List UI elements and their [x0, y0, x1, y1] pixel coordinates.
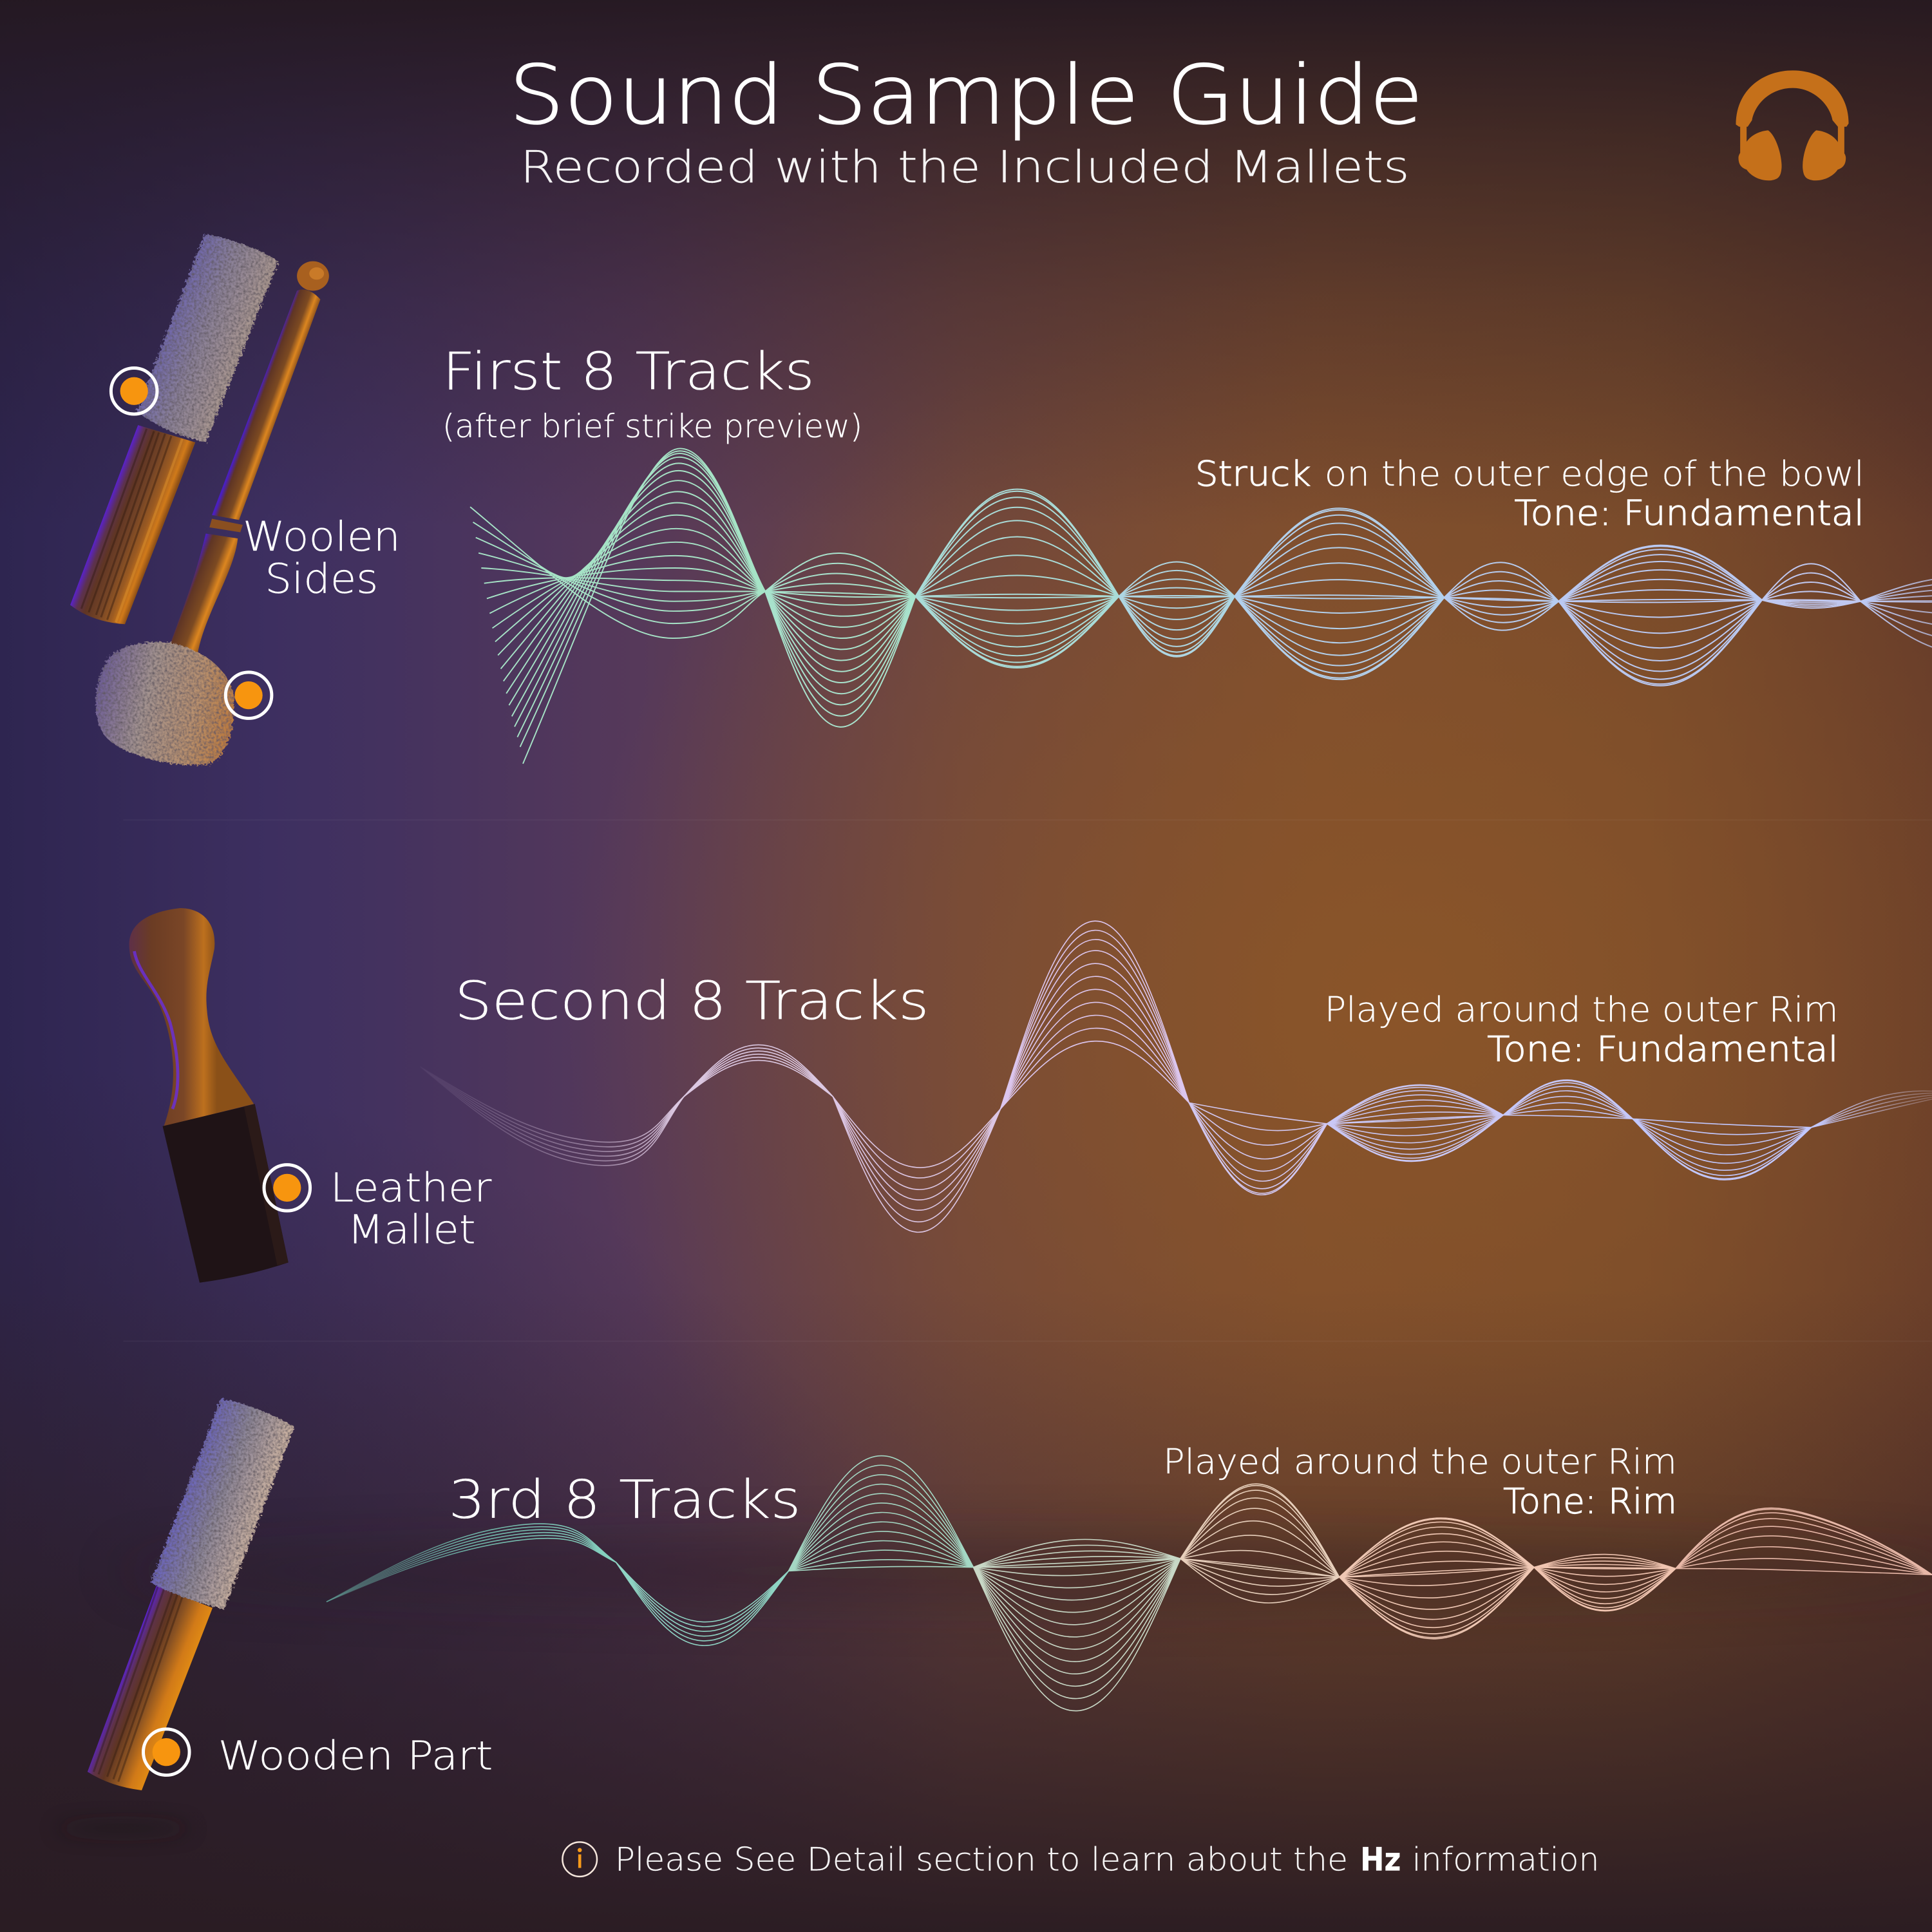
- note: first tracks tone: Struck: [1195, 453, 1311, 494]
- title: Sound Sample Guide: [509, 48, 1423, 142]
- heading: first 8 tracks: (after brief strike preview): [442, 408, 862, 445]
- label: woolen sides: Sides: [265, 554, 378, 602]
- note: second tracks tone: Played around the outer Rim: [1325, 989, 1839, 1030]
- heading: first 8 tracks: First 8 Tracks: [442, 341, 815, 402]
- wool mallet with wooden handle: [70, 234, 278, 624]
- note: second tracks tone: [1325, 989, 1839, 1069]
- label: wooden part: Wooden Part: [218, 1733, 493, 1779]
- note: first tracks tone: [1195, 453, 1864, 533]
- note: second tracks tone: Tone: Fundamental: [1487, 1028, 1839, 1069]
- waveform: second 8 tracks: [419, 918, 1932, 1238]
- footer note: Please See Detail section to learn about the: [615, 1841, 1348, 1878]
- note: first tracks tone: Tone: Fundamental: [1514, 493, 1864, 533]
- icon: info: [562, 1842, 597, 1877]
- icon: headphones: [1736, 70, 1849, 180]
- marker: leather: [264, 1165, 310, 1211]
- wool-head mallet with long handle: [96, 261, 329, 765]
- note: third tracks tone: Tone: Rim: [1503, 1481, 1677, 1521]
- footer note: Hz: [1360, 1841, 1401, 1878]
- heading: first 8 tracks: [442, 341, 862, 445]
- label: leather mallet: [330, 1165, 492, 1253]
- waveform: third 8 tracks: [327, 1454, 1932, 1715]
- shadow under mallet: [55, 1823, 191, 1835]
- subtitle: Recorded with the Included Mallets: [520, 142, 1410, 193]
- marker: felt head: [225, 672, 272, 718]
- marker: wooden part: [144, 1729, 189, 1775]
- heading: third 8 tracks: 3rd 8 Tracks: [448, 1470, 801, 1531]
- note: first tracks tone: on the outer edge of the bowl: [1325, 453, 1864, 494]
- note: third tracks tone: [1163, 1441, 1677, 1521]
- label: leather mallet: Leather: [330, 1165, 492, 1211]
- label: leather mallet: Mallet: [348, 1207, 476, 1253]
- note: third tracks tone: Played around the outer Rim: [1163, 1441, 1677, 1482]
- label: woolen sides: Woolen: [243, 513, 401, 560]
- waveform: first 8 tracks: [470, 448, 1932, 764]
- leather mallet: [129, 908, 289, 1283]
- felt mallet with wooden part: [88, 1399, 294, 1790]
- marker: felt side: [111, 368, 157, 414]
- heading: second 8 tracks: Second 8 Tracks: [455, 971, 929, 1032]
- label: woolen sides: [243, 513, 401, 602]
- footer note: information: [1412, 1841, 1599, 1878]
